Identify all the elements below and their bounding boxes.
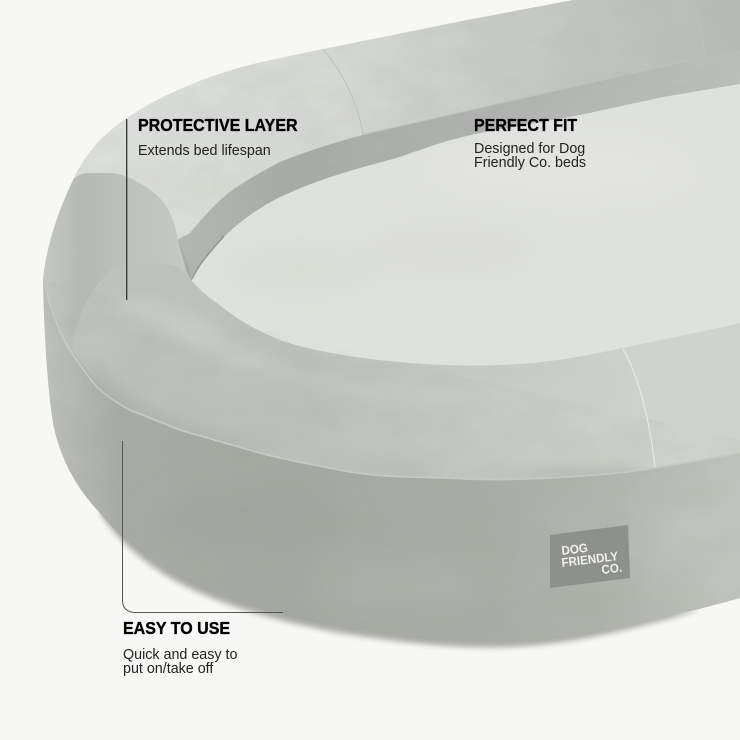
heading: protective layer: PROTECTIVE LAYER [138,115,298,135]
text: easy to use: Quick and easy to [123,647,237,663]
corner fill behind crease [178,240,205,295]
right bolster segment [623,323,740,467]
mattress [192,84,740,400]
callout: protective layer [138,115,298,159]
callout: perfect fit [474,115,586,170]
callout: easy to use [123,618,237,676]
bed side wall [43,280,740,642]
callout line: protective layer [126,119,128,300]
fabric label: brand tag: CO. [601,560,623,577]
callout line: easy to use [122,441,283,612]
fabric label: brand tag: FRIENDLY [561,549,619,570]
mattress crease [192,236,224,279]
mattress shading [220,140,690,296]
text: protective layer: Extends bed lifespan [138,143,271,159]
side wall seam [45,283,740,479]
text: perfect fit [474,141,586,170]
inner wall band [178,50,740,280]
front bolster shading [95,309,636,478]
heading: perfect fit: PERFECT FIT [474,115,577,135]
side wall shading [160,490,740,624]
text: perfect fit: Designed for Dog [474,141,585,157]
velvet texture: rim and band [0,0,740,300]
text: easy to use [123,647,237,676]
text: perfect fit: Friendly Co. beds [474,154,586,170]
back rim [73,0,740,273]
front bolster [72,263,655,479]
text: easy to use: put on/take off [123,660,213,676]
back rim seams [323,7,705,134]
left bolster piece [43,173,200,350]
floor shadow [100,510,700,647]
heading: easy to use: EASY TO USE [123,618,230,638]
fabric label: brand tag [550,525,630,588]
fabric label: brand tag: DOG [561,540,589,558]
vertical seam right [623,349,655,467]
